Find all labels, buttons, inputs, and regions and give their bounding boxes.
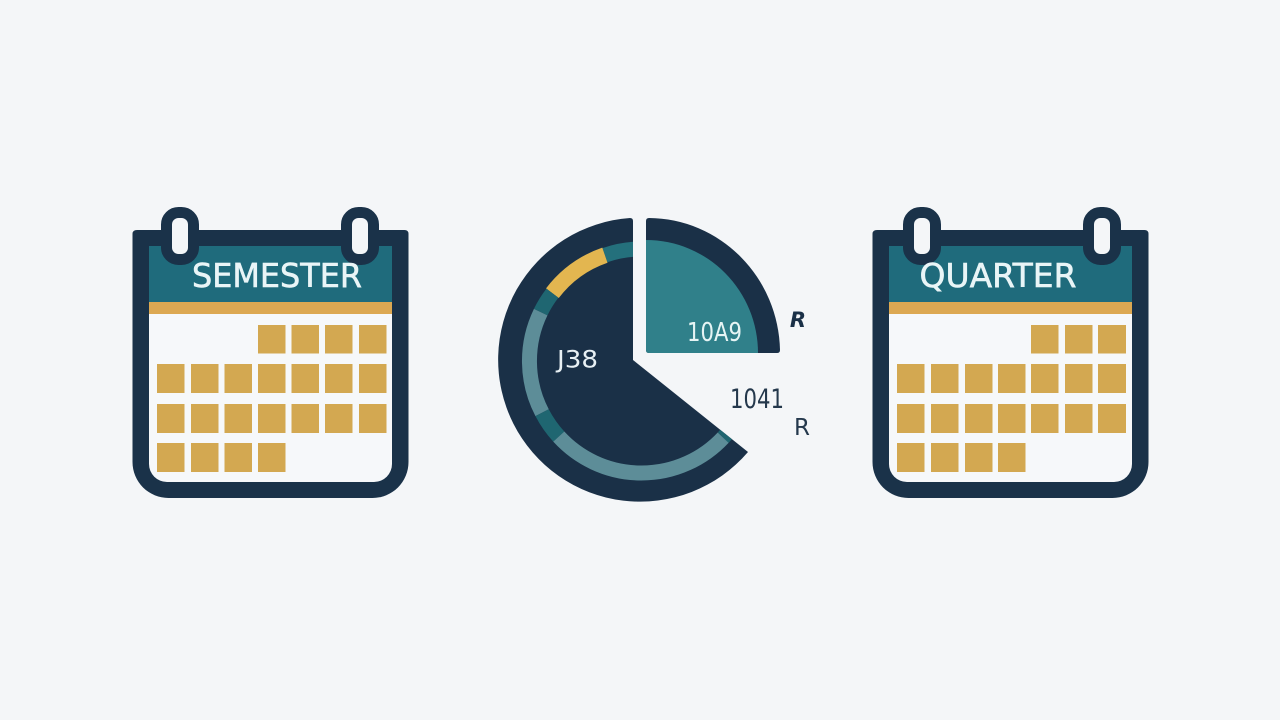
label: semester: SEMESTER (192, 256, 362, 295)
calendar page (889, 246, 1132, 482)
value: left slice: J38 (555, 346, 598, 374)
binder ring left (166, 212, 194, 260)
day squares (897, 325, 1126, 472)
label: R: R (794, 415, 810, 441)
gold stripe (149, 302, 392, 314)
day squares (157, 325, 386, 472)
calendar: quarter (872, 212, 1148, 498)
ring: dark teal end (718, 430, 732, 443)
navy quadrant (646, 218, 780, 353)
binder ring right (1088, 212, 1116, 260)
header band (889, 246, 1132, 302)
gold stripe (889, 302, 1132, 314)
binder ring right (346, 212, 374, 260)
pie chart (498, 218, 810, 502)
calendar frame (872, 230, 1148, 498)
ring: light teal left (529, 312, 542, 413)
binder ring left (908, 212, 936, 260)
ring: gold highlight (552, 255, 605, 293)
large navy slice (498, 218, 748, 502)
ring: top teal (605, 249, 634, 255)
label: quarter: QUARTER (920, 256, 1076, 295)
header band (149, 246, 392, 302)
teal quadrant fill (646, 240, 758, 353)
label: R italic: R (790, 308, 806, 332)
value: outside: 1041 (730, 384, 784, 415)
inner ring segments (529, 249, 736, 473)
calendar: semester (132, 212, 408, 498)
ring: light teal bottom (559, 437, 723, 473)
ring: dark teal lower (542, 413, 559, 437)
calendar frame (132, 230, 408, 498)
ring: dark teal upper (541, 293, 552, 312)
calendar page (149, 246, 392, 482)
value: quadrant: 10A9 (687, 318, 742, 348)
